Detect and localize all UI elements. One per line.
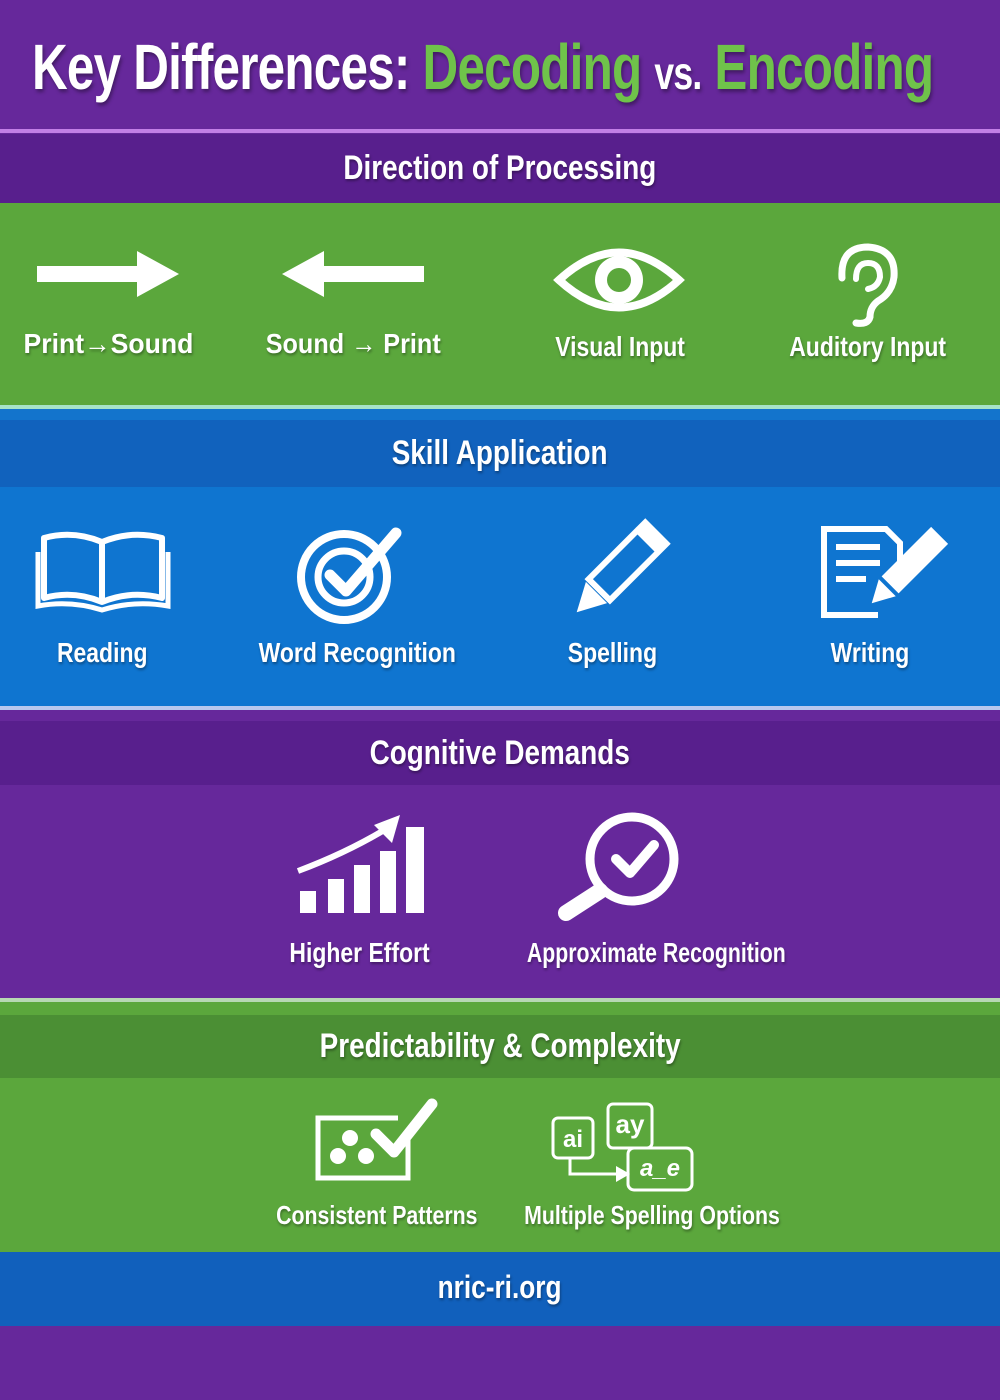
section header: Direction of Processing [0, 134, 1000, 203]
title [0, 0, 1000, 130]
icon: multiple spellings: ay [616, 1109, 645, 1139]
panel: direction of processing [0, 203, 1000, 406]
icon: ear [838, 244, 898, 327]
label: word recognition: Word Recognition [259, 637, 456, 668]
icon: left arrow [282, 251, 424, 297]
label: auditory input: Auditory Input [790, 331, 946, 362]
title: Key Differences: Decoding vs. Encoding [32, 31, 933, 103]
icon: pencil [576, 518, 671, 612]
section header: Skill Application [0, 420, 1000, 487]
panel: cognitive demands [0, 785, 1000, 998]
label: consistent patterns: Consistent Patterns [276, 1200, 478, 1230]
label: visual input: Visual Input [555, 331, 685, 362]
icon: multiple spellings [552, 1102, 694, 1192]
icon: writing document [821, 526, 948, 618]
icon: multiple spellings: ai [563, 1126, 583, 1153]
label: spelling: Spelling [567, 637, 657, 668]
section header: Skill Application: Skill Application [392, 434, 608, 472]
icon: open book [36, 532, 170, 613]
section header: Predictability & Complexity [0, 1015, 1000, 1078]
icon: target check [297, 528, 402, 624]
section header: Direction of Processing: Direction of Processing [344, 149, 656, 187]
section header: Predictability & Complexity: Predictability & Complexity [319, 1027, 680, 1065]
icon: rising bar chart [297, 815, 424, 913]
label: writing: Writing [831, 637, 909, 668]
icon: eye [553, 248, 685, 312]
label: reading: Reading [57, 637, 147, 668]
label: sound to print: Sound → Print [266, 328, 440, 359]
label: multiple spelling options: Multiple Spelling Options [524, 1200, 780, 1230]
panel: predictability & complexity [0, 1078, 1000, 1252]
icon: multiple spellings: a_e [640, 1155, 680, 1182]
section header: Cognitive Demands: Cognitive Demands [370, 734, 630, 772]
section header: Cognitive Demands [0, 721, 1000, 785]
panel: skill application [0, 487, 1000, 706]
icon: magnifier check [558, 812, 678, 921]
footer: website [0, 1252, 1000, 1326]
label: print to sound: Print→Sound [23, 328, 193, 359]
footer: website: nric-ri.org [438, 1269, 562, 1305]
icon: right arrow [37, 251, 179, 297]
label: approximate recognition: Approximate Recognition [527, 937, 786, 968]
icon: consistent patterns [316, 1098, 438, 1180]
label: higher effort: Higher Effort [290, 937, 430, 968]
